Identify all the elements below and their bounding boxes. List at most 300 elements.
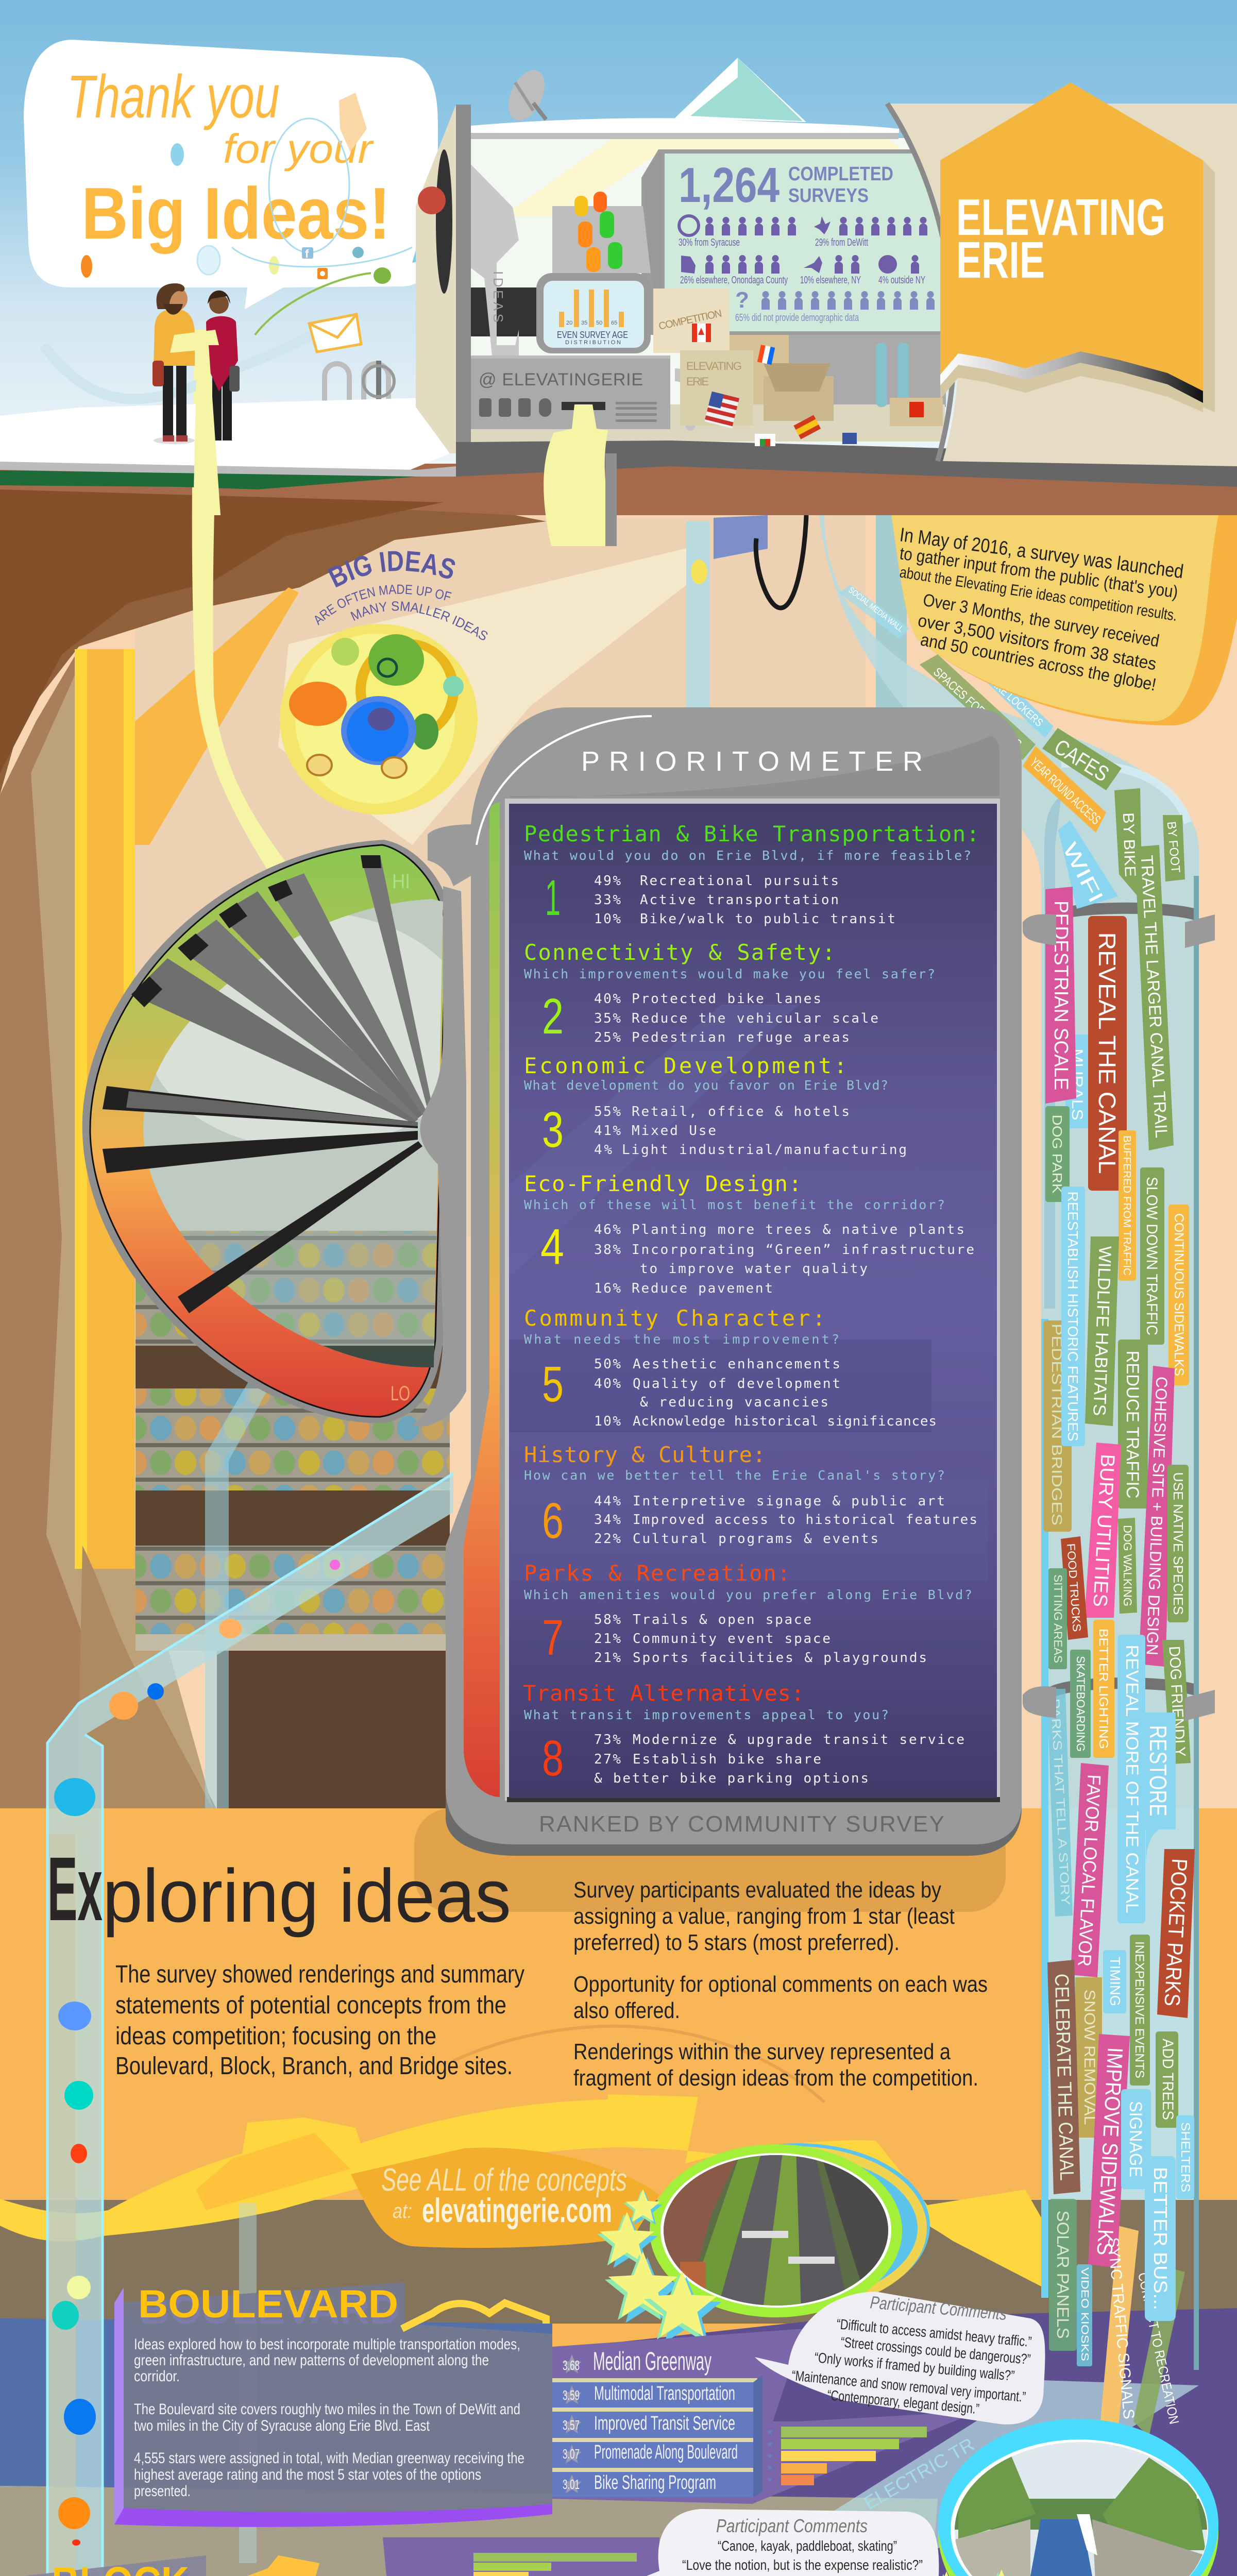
category 5: Acknowledge historical significances [633, 1414, 937, 1429]
category 5: What needs the most improvement? [524, 1332, 839, 1347]
panel description: corridor. [134, 2368, 180, 2385]
comment bubble: boulevard: “Contemporary, elegant design.” [826, 2387, 980, 2417]
tag: parks that tell a story [1047, 1689, 1073, 1917]
control panel with buttons [552, 149, 662, 330]
category 5: 5 [542, 1356, 564, 1412]
category 6: Cultural programs & events [633, 1531, 878, 1547]
category 2: Protected bike lanes [632, 991, 821, 1007]
boulevard ranked list: Improved Transit Service [594, 2413, 735, 2434]
tag: use native species: USE NATIVE SPECIES [1171, 1472, 1186, 1615]
tag: shelters: SHELTERS [1178, 2122, 1192, 2192]
category 3: What development do you favor on Erie Blvd? [524, 1078, 888, 1093]
interior lower wall dark [471, 287, 538, 336]
stat row: onondaga [680, 255, 788, 286]
tag: sitting areas [1048, 1568, 1067, 1669]
age monitor: 65 [611, 320, 617, 326]
panel description [134, 2336, 524, 2500]
comment bubble: boulevard: Participant Comments [869, 2293, 1008, 2324]
gradient strip [464, 803, 500, 1797]
comment bubble: block: “Love the notion, but is the expense realistic?” [682, 2557, 923, 2573]
soil layer [0, 464, 1237, 567]
tag: murals [1065, 1035, 1088, 1128]
pipe left of boxes [675, 368, 696, 431]
interior floor [471, 404, 945, 442]
boulevard ranked list: 3.57 [563, 2417, 580, 2433]
category 3: Economic Development: [524, 1053, 847, 1078]
stat row: no demographic data: 65% did not provide demographic data [735, 312, 859, 324]
left tube [47, 1473, 453, 2576]
comment bubble: block [634, 2509, 939, 2576]
see all badge: at: [393, 2200, 412, 2223]
category 1: Active transportation [640, 892, 839, 908]
category 3: 4% [594, 1142, 612, 1158]
tag: improve sidewalks: IMPROVE SIDEWALKS [1092, 2047, 1128, 2256]
text: survey intro right: fragment of design ideas from the competition. [573, 2065, 978, 2091]
road strip [456, 440, 1237, 487]
panel description: presented. [134, 2483, 191, 2500]
blue band 1 [0, 2318, 552, 2494]
elevating erie banner [940, 82, 1203, 412]
tag: celebrate the canal: CELEBRATE THE CANAL [1050, 1973, 1077, 2181]
category 1: What would you do on Erie Blvd, if more feasible? [524, 848, 971, 863]
megaphone mouth [436, 149, 452, 294]
screen [509, 804, 997, 1798]
tube clamp lower front [1023, 1686, 1215, 1721]
tag: pedestrian bridges [1043, 1320, 1072, 1532]
category 1: Recreational pursuits [640, 873, 839, 889]
text: survey intro left [115, 1961, 524, 2080]
tag: reveal more of the canal [1117, 1635, 1145, 1923]
cardboard boxes with flags: COMPETITION [657, 308, 723, 332]
stat row: no demographic data [735, 287, 935, 324]
tube clamp upper front [1023, 914, 1215, 948]
stat row: onondaga: 26% elsewhere, Onondaga County [680, 275, 788, 286]
cardboard boxes with flags [653, 289, 943, 446]
tag: restore: RESTORE [1145, 1725, 1172, 1817]
device shadow [446, 1752, 1022, 1856]
category 1: 10% [594, 911, 621, 927]
headline: thank you for your big ideas: for your [223, 126, 375, 172]
green turf [0, 470, 417, 489]
device body [446, 707, 1022, 1844]
category 8: Transit Alternatives: [523, 1681, 804, 1706]
block ranked list [383, 2537, 660, 2576]
tag: skateboarding [1070, 1650, 1091, 1758]
age monitor: 35 [581, 320, 587, 326]
category 6: 34% [594, 1512, 621, 1528]
thin vertical tube behind panels [239, 2202, 257, 2563]
category 2: 2 [542, 988, 564, 1044]
panel description: two miles in the City of Syracuse along Erie Blvd. East [134, 2417, 430, 2434]
interior light cone [502, 138, 907, 216]
tag: timing [1103, 1950, 1126, 2013]
elevating erie banner: ELEVATING [956, 189, 1165, 246]
beige building right [887, 104, 1237, 466]
tag: dog park: DOG PARK [1049, 1115, 1065, 1194]
tag: skateboarding: SKATEBOARDING [1074, 1656, 1087, 1752]
petri circle: big ideas [280, 624, 478, 815]
tag: murals: MURALS [1069, 1049, 1086, 1120]
tube highlight arc [1061, 764, 1188, 823]
panel: boulevard [114, 2282, 552, 2527]
category 4 [524, 1171, 974, 1296]
tag: food trucks [1061, 1536, 1088, 1640]
stat row: elsewhere ny: 10% elsewhere, NY [800, 275, 861, 286]
category 6: 22% [594, 1531, 621, 1547]
survey note: Over 3 Months, the survey received [922, 590, 1161, 651]
tag: year round access [1023, 746, 1106, 833]
dial hub [412, 886, 466, 1427]
pale yellow ribbon into soil [192, 330, 289, 871]
tag: dog park [1045, 1106, 1070, 1202]
cave background peach [0, 515, 1237, 1808]
category 4: to improve water quality [640, 1261, 868, 1277]
darker wave notch [196, 2133, 350, 2210]
survey note: to gather input from the public (that's you) [899, 544, 1179, 602]
boulevard ranked list: Promenade Along Boulevard [594, 2442, 738, 2463]
stat: completed surveys: COMPLETED [788, 163, 893, 185]
tag: wifi: WIFI [1058, 839, 1108, 907]
tag: food trucks: FOOD TRUCKS [1064, 1543, 1083, 1632]
squiggle [402, 2303, 546, 2329]
tag: slow down traffic: SLOW DOWN TRAFFIC [1143, 1177, 1160, 1335]
stat: completed surveys [679, 158, 893, 213]
category 1: 49% [594, 873, 621, 889]
category 7: Parks & Recreation: [524, 1561, 790, 1586]
stars around photo 2 [913, 2569, 1191, 2576]
comment bubble: boulevard: “Maintenance and snow removal very important.” [791, 2367, 1026, 2405]
soil darkest mass upper left [0, 489, 443, 773]
elevating erie banner: ERIE [956, 231, 1045, 289]
tag: wildlife habitats: WILDLIFE HABITATS [1089, 1246, 1115, 1416]
speech bubble [24, 40, 438, 309]
boulevard ranked list: 3.01 [563, 2477, 580, 2492]
body white edge [477, 716, 652, 845]
grey ground strip [0, 462, 456, 477]
tag: signage [1121, 2089, 1151, 2189]
survey note: about the Elevating Erie ideas competition results. [899, 564, 1178, 624]
category 7: Trails & open space [633, 1612, 811, 1628]
category 5: 10% [594, 1414, 621, 1429]
tag: dog friendly: DOG FRIENDLY [1165, 1646, 1189, 1757]
stars around photo 1 [597, 2189, 721, 2343]
category 2: 25% [594, 1030, 621, 1045]
stat: completed surveys: 1,264 [679, 158, 780, 213]
tag: by foot: BY FOOT [1164, 821, 1182, 874]
category 7 [524, 1561, 972, 1666]
stat row: outside ny: 4% outside NY [878, 275, 925, 286]
tag: better bus [1145, 2156, 1176, 2321]
see all badge: elevatingerie.com [422, 2191, 612, 2229]
category 3 [524, 1053, 907, 1158]
tag: pedestrian bridges: PEDESTRIAN BRIDGES [1049, 1324, 1065, 1526]
red button [418, 187, 446, 214]
category 4: 4 [540, 1218, 564, 1275]
brown band under wave [0, 2200, 1237, 2324]
panel description: 4,555 stars were assigned in total, with Median greenway receiving the [134, 2450, 524, 2467]
headline: thank you for your big ideas [67, 63, 391, 255]
tag: dog walking: DOG WALKING [1121, 1525, 1134, 1606]
boulevard bar chart [767, 2427, 927, 2485]
category 1: 33% [594, 892, 621, 908]
machine base [471, 355, 670, 429]
tag: reduce traffic: REDUCE TRAFFIC [1123, 1351, 1142, 1498]
category 7: 21% [594, 1631, 621, 1647]
tag: year round access: YEAR ROUND ACCESS [1027, 755, 1104, 827]
roof beam [471, 133, 899, 139]
tag: connect to recreation: CONNECT TO RECREATION [1135, 2271, 1182, 2426]
dial needles [103, 855, 433, 1313]
megaphone [471, 164, 519, 355]
tag: reestablish historic features [1061, 1187, 1085, 1446]
tag: electric tr: ELECTRIC TR [860, 2433, 978, 2514]
category 1: Pedestrian & Bike Transportation: [524, 821, 979, 846]
swoosh trail [44, 330, 319, 399]
age monitor: EVEN SURVEY AGE [557, 330, 628, 340]
tan band [0, 2486, 938, 2576]
comment bubble: boulevard: “Difficult to access amidst heavy traffic.” [836, 2316, 1032, 2350]
tag: shelters [1176, 2115, 1194, 2199]
category 4: Reduce pavement [632, 1281, 773, 1296]
heading: exploring ideas: Ex [47, 1839, 103, 1940]
social icons in bubble: f [305, 247, 309, 260]
machine base: @ ELEVATINGERIE [479, 370, 643, 389]
category 5 [524, 1306, 937, 1429]
text: survey intro left: statements of potential concepts from the [115, 1992, 506, 2019]
age monitor: DISTRIBUTION [565, 340, 621, 346]
yellow diagonal brace [135, 587, 299, 845]
tag: continuous sidewalks: CONTINUOUS SIDEWALKS [1172, 1213, 1186, 1376]
person: man [152, 283, 195, 444]
tag: buffered from traffic [1119, 1130, 1136, 1281]
tag: reestablish historic features: REESTABLISH HISTORIC FEATURES [1065, 1191, 1081, 1442]
snow ground left [0, 398, 450, 470]
text: survey intro right: Renderings within the survey represented a [573, 2039, 951, 2064]
tag: sync traffic signals [1100, 2226, 1139, 2432]
roof snow [471, 118, 899, 133]
squiggle [222, 2555, 319, 2576]
stat: completed surveys: SURVEYS [788, 185, 869, 207]
headline: thank you for your big ideas: Thank you [67, 63, 280, 131]
green swoosh [255, 273, 371, 335]
heading: big ideas [310, 545, 491, 644]
photo 1: boulevard rendering [650, 2143, 930, 2317]
category 1: Bike/walk to public transit [640, 911, 895, 927]
category 3: Light industrial/manufacturing [622, 1142, 907, 1158]
social icons in bubble [302, 247, 391, 284]
comment bubble: boulevard [755, 2292, 1045, 2425]
tag: video kiosks [1077, 2264, 1092, 2366]
tag: bury utilities: BURY UTILITIES [1089, 1453, 1119, 1607]
cardboard boxes with flags: ELEVATING [686, 360, 742, 372]
tag: add trees [1156, 2031, 1178, 2128]
photo 2: block rendering [938, 2419, 1218, 2576]
category 1 [524, 821, 979, 927]
interior lower wall grey [730, 335, 946, 407]
heading: big ideas: MANY SMALLER IDEAS [348, 598, 491, 644]
cave center chamber [135, 515, 866, 1236]
age monitor [536, 273, 651, 353]
faint floor arc [453, 2026, 824, 2102]
dial label hi: HI [392, 870, 410, 893]
tag: cohesive site + building design: COHESIVE SITE + BUILDING DESIGN [1143, 1376, 1171, 1655]
tag: slow down traffic [1140, 1167, 1164, 1345]
tube edges [1041, 876, 1199, 2370]
paper ribbon from machine [544, 404, 616, 546]
light beam from hub [278, 546, 703, 845]
dial gauge [82, 824, 474, 1427]
tag: inexpensive events: INEXPENSIVE EVENTS [1132, 1941, 1146, 2078]
idea tags on the right tube [839, 585, 1199, 2437]
category 4: Which of these will most benefit the corridor? [524, 1197, 945, 1212]
category 5: Aesthetic enhancements [633, 1357, 840, 1372]
boulevard ranked list: 3.59 [563, 2387, 580, 2403]
tag: restore [1141, 1713, 1176, 1865]
category 7: 58% [594, 1612, 621, 1628]
tag: cafes: CAFES [1050, 734, 1113, 786]
tag: pocket parks: POCKET PARKS [1160, 1858, 1192, 2007]
category 5: 50% [594, 1357, 621, 1372]
survey note: and 50 countries across the globe! [919, 630, 1158, 695]
see all badge: See ALL of the concepts [381, 2162, 627, 2198]
category 4: Incorporating “Green” infrastructure [632, 1242, 974, 1258]
comment bubble: block: Participant Comments [716, 2515, 868, 2536]
category 2: Pedestrian refuge areas [632, 1030, 850, 1045]
boulevard ranked list [552, 2329, 979, 2504]
heading: big ideas: ARE OFTEN MADE UP OF [315, 584, 452, 625]
boulevard ranked list: Bike Sharing Program [594, 2472, 716, 2494]
tag: pedestrian scale: PEDESTRIAN SCALE [1050, 901, 1072, 1090]
tag: better bus: BETTER BUS... [1150, 2167, 1171, 2310]
category 6: Interpretive signage & public art [633, 1494, 945, 1509]
tag: sync traffic signals text: SYNC TRAFFIC SIGNALS [1105, 2236, 1137, 2420]
tag: favor local flavor: FAVOR LOCAL FLAVOR [1074, 1774, 1105, 1967]
category 3: Mixed Use [632, 1123, 716, 1139]
black cord [756, 515, 806, 608]
tag: by bike [1114, 788, 1142, 902]
tag: sitting areas: SITTING AREAS [1052, 1574, 1064, 1663]
tag: timing: TIMING [1107, 1957, 1123, 2006]
tag: better lighting [1093, 1620, 1114, 1758]
category 6: History & Culture: [524, 1442, 766, 1467]
stat row: no demographic data: ? [735, 287, 749, 313]
tube beads [48, 1560, 340, 2576]
blue tubes on back wall [876, 343, 909, 407]
category 8: 73% [594, 1732, 621, 1748]
category 6: How can we better tell the Erie Canal's story? [524, 1468, 945, 1483]
dial glass [143, 899, 443, 1367]
building interior [471, 138, 943, 442]
category 2: 40% [594, 991, 621, 1007]
category 5: & reducing vacancies [640, 1395, 828, 1410]
category 7: 21% [594, 1650, 621, 1666]
tag: buffered from traffic: BUFFERED FROM TRAFFIC [1121, 1136, 1132, 1276]
category 4: Planting more trees & native plants [632, 1222, 964, 1238]
category 8: & better bike parking options [594, 1771, 869, 1786]
headline: thank you for your big ideas: Big Ideas! [81, 173, 391, 255]
building left wall [416, 105, 456, 453]
screen readout [523, 821, 979, 1786]
category 5: 40% [594, 1376, 621, 1392]
category 2 [524, 940, 935, 1045]
block bar chart upper [473, 2553, 637, 2576]
text: survey intro right: Opportunity for optional comments on each was [573, 1972, 988, 1997]
tag: reveal the canal: REVEAL THE CANAL [1094, 933, 1121, 1174]
pipe into soil [605, 453, 617, 546]
tag: reveal more of the canal: REVEAL MORE OF THE CANAL [1122, 1645, 1142, 1913]
tag: by foot [1163, 815, 1185, 882]
tag: snow removal: SNOW REMOVAL [1081, 1990, 1098, 2125]
text: survey intro left: ideas competition; focusing on the [115, 2023, 436, 2050]
tag: pedestrian scale [1045, 887, 1076, 1104]
panel description: green infrastructure, and new patterns of development along the [134, 2352, 489, 2369]
dial label lo: LO [391, 1382, 410, 1405]
category 3: 55% [594, 1104, 621, 1120]
survey note: In May of 2016, a survey was launched [899, 524, 1185, 583]
tag: signage: SIGNAGE [1126, 2101, 1145, 2177]
device footer text: RANKED BY COMMUNITY SURVEY [539, 1811, 944, 1837]
category 4: Eco-Friendly Design: [524, 1171, 802, 1196]
age monitor: 20 [566, 320, 572, 326]
prioritometer device [446, 707, 1022, 1856]
device title: PRIORITOMETER [581, 746, 923, 777]
bubble decorations [81, 93, 443, 278]
tag: continuous sidewalks [1168, 1205, 1189, 1385]
dial knob [428, 824, 471, 886]
category 6: Improved access to historical features [633, 1512, 977, 1528]
text: survey intro right: preferred) to 5 stars (most preferred). [573, 1930, 900, 1955]
left rock wall highlight [31, 670, 213, 1808]
tube inner shadow [1044, 796, 1061, 1309]
comment bubble: boulevard: “Street crossings could be dangerous?” [840, 2334, 1031, 2367]
diagonal tube [124, 2380, 1199, 2576]
orange floor [0, 1808, 1041, 2380]
category 2: Connectivity & Safety: [524, 940, 835, 965]
tube clamp upper back arc [1051, 908, 1195, 917]
stat row: outside ny [878, 255, 925, 286]
category 8: Establish bike share [633, 1752, 821, 1767]
tag: reduce traffic [1118, 1340, 1148, 1509]
text: survey intro left: The survey showed renderings and summary [115, 1961, 524, 1988]
panel title: BOULEVARD [138, 2282, 398, 2326]
text: survey intro left: Boulevard, Block, Branch, and Bridge sites. [115, 2053, 513, 2080]
screen frame [505, 799, 1000, 1801]
survey note [891, 515, 1237, 725]
stats screen [641, 149, 943, 335]
prioritometer floor shadow [414, 1808, 1006, 1912]
heading: big ideas: BIG IDEAS [328, 551, 455, 587]
panel description: highest average rating and the most 5 star votes of the options [134, 2466, 481, 2483]
person: woman [206, 291, 240, 440]
tag: spaces for families: SPACES FOR FAMILIES [930, 665, 1024, 751]
category 3: 41% [594, 1123, 621, 1139]
tube clamp lower back arc [1051, 1683, 1195, 1692]
category 3: Retail, office & hotels [632, 1104, 850, 1120]
boulevard ranked list: 3.07 [563, 2446, 580, 2462]
yellow wave band [0, 2094, 1046, 2287]
category 8: Modernize & upgrade transit service [633, 1732, 964, 1748]
category 2: Reduce the vehicular scale [632, 1011, 878, 1026]
stat row: syracuse [679, 216, 796, 248]
rock foreground in front of shelves [77, 1546, 213, 1808]
category 7: Community event space [633, 1631, 831, 1647]
tag: dog walking [1118, 1518, 1137, 1614]
tag: travel the larger canal trail: TRAVEL THE LARGER CANAL TRAIL [1138, 855, 1171, 1139]
tag: reveal the canal [1088, 916, 1127, 1191]
tag: wifi [1058, 820, 1118, 909]
tag: video kiosks: VIDEO KIOSKS [1079, 2267, 1090, 2361]
survey note: over 3,500 visitors from 38 states [917, 611, 1158, 674]
